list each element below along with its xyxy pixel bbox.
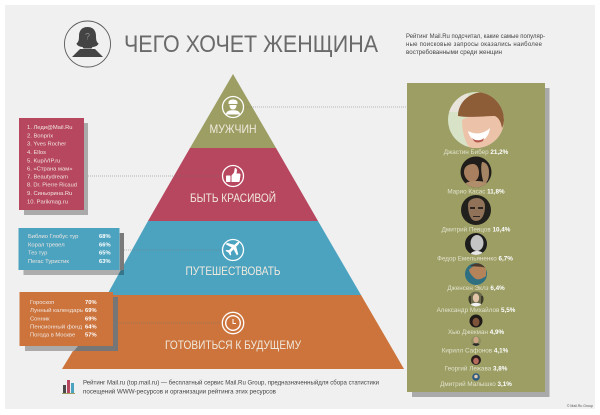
icon: bar chart xyxy=(62,380,75,394)
label: men: МУЖЧИН xyxy=(210,122,256,136)
names and percentages: Федор Емельяненко 6,7% xyxy=(437,256,513,262)
pyramid xyxy=(62,74,404,369)
footer note: Рейтинг Mail.ru (top.mail.ru) — бесплатный сервис Mail.Ru Group, предназначенныйдля сбора статистики xyxy=(83,380,379,386)
panel: beauty sites: 1. Леди@Mail.Ru xyxy=(27,125,73,131)
photo: Justin Bieber xyxy=(448,92,504,148)
panel: future queries: Погода в Москве xyxy=(30,332,75,338)
tier: beautiful xyxy=(148,148,318,221)
names and percentages: Дмитрий Малышко 3,1% xyxy=(440,380,512,388)
panel: travel agencies xyxy=(18,228,124,275)
panel: beauty sites: 5. KupiVIP.ru xyxy=(27,158,60,164)
photo: Dmitry Malyshko xyxy=(472,373,480,381)
photo: Jensen Ackles xyxy=(465,263,487,285)
names and percentages: Дженсен Эклз 6,4% xyxy=(447,285,505,292)
panel: future queries: 57% xyxy=(85,332,97,338)
label: beautiful: БЫТЬ КРАСИВОЙ xyxy=(190,190,276,205)
panel: future queries xyxy=(20,292,118,351)
panel: travel agencies: Тез тур xyxy=(28,250,47,256)
panel: beauty sites: 7. Beautydream xyxy=(27,174,68,180)
label: travel: ПУТЕШЕСТВОВАТЬ xyxy=(186,264,281,278)
panel: beauty sites: 6. «Страна мам» xyxy=(27,166,72,172)
photo: Hugh Jackman xyxy=(470,314,482,328)
panel: beauty sites: 2. Bonprix xyxy=(27,133,53,139)
intro text: Рейтинг Mail.Ru подсчитал, какие самые популяр- xyxy=(406,33,545,40)
panel: travel agencies: Пегас Туристик xyxy=(28,259,69,265)
photo: Dmitry Pevtsov xyxy=(461,195,491,225)
panel: future queries: 69% xyxy=(85,308,97,314)
tier: future xyxy=(62,295,404,369)
icon: woman silhouette with question mark xyxy=(64,21,110,67)
panel: travel agencies: Библио Глобус тур xyxy=(28,234,78,240)
names and percentages: Георгий Лежава 3,8% xyxy=(445,364,508,372)
panel: beauty sites: 8. Dr. Pierre Ricaud xyxy=(27,182,77,188)
panel: future queries: 70% xyxy=(85,300,97,306)
photo: Mario Casas xyxy=(460,156,492,188)
intro text xyxy=(406,33,545,56)
panel: travel agencies: 63% xyxy=(99,259,111,265)
label: future: ГОТОВИТЬСЯ К БУДУЩЕМУ xyxy=(165,338,301,352)
panel: beauty sites: 10. Parikmag.ru xyxy=(27,199,68,205)
icon: woman silhouette with question mark: ? xyxy=(85,32,90,42)
photo: Kirill Safonov xyxy=(471,336,481,346)
panel: beauty sites: 3. Yves Rocher xyxy=(27,142,66,148)
intro text: востребованными среди женщин xyxy=(406,50,502,56)
names and percentages: Дмитрий Певцов 10,4% xyxy=(442,226,511,234)
icon: airplane xyxy=(222,240,244,260)
panel: travel agencies: 68% xyxy=(99,234,111,240)
photo: Alexander Mikhailov xyxy=(468,292,484,306)
footer note xyxy=(83,380,379,396)
names and percentages: Кирилл Сафонов 4,1% xyxy=(442,348,509,354)
names and percentages xyxy=(437,148,516,388)
icon: clock xyxy=(222,312,244,334)
names and percentages: Александр Михайлов 5,5% xyxy=(437,306,516,314)
photo: Fedor Emelianenko xyxy=(465,233,487,255)
panel: beauty sites xyxy=(19,118,88,215)
footer note: посещений WWW-ресурсов и организации рейтинга этих ресурсов xyxy=(83,388,276,396)
panel: future queries: Лунный календарь xyxy=(30,307,83,314)
panel: beauty sites: 9. Синьорина.Ru xyxy=(27,191,72,197)
copyright: © Mail.Ru Group xyxy=(567,404,593,408)
panel: celebrity ranking xyxy=(407,83,550,397)
icon: man xyxy=(222,96,244,118)
panel: travel agencies: 65% xyxy=(99,250,111,256)
panel: future queries: Пенсионный фонд xyxy=(30,324,83,330)
tier: men xyxy=(190,74,276,148)
panel: future queries: Сонник xyxy=(30,316,50,322)
intro text: ные поисковые запросы оказались наиболее xyxy=(406,42,543,48)
connector lines xyxy=(84,107,407,323)
title: ЧЕГО ХОЧЕТ ЖЕНЩИНА xyxy=(124,31,379,58)
panel: beauty sites: 4. Ellos xyxy=(27,150,46,156)
names and percentages: Марио Касас 11,8% xyxy=(447,188,505,196)
panel: future queries: 64% xyxy=(85,324,97,330)
panel: travel agencies: Корал тревел xyxy=(28,242,65,248)
panel: future queries: Гороскоп xyxy=(30,300,54,306)
names and percentages: Хью Джекман 4,9% xyxy=(448,329,504,336)
names and percentages: Джастин Бибер 21,2% xyxy=(444,148,509,156)
panel: future queries: 69% xyxy=(85,316,97,322)
panel: travel agencies: 66% xyxy=(99,242,111,248)
icon: thumbs up xyxy=(222,166,244,186)
photo: Georgy Lezhava xyxy=(471,355,481,365)
tier: travel xyxy=(107,221,361,295)
